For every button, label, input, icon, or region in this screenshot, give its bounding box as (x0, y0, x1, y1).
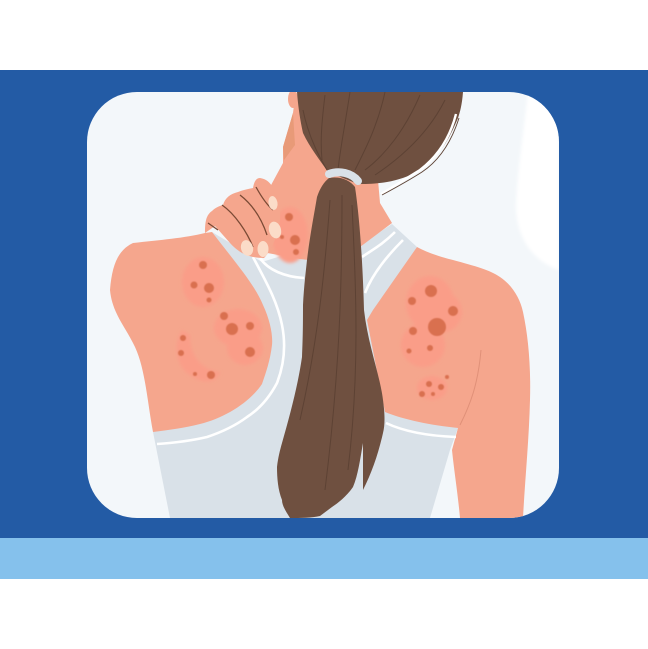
left shoulder and back (110, 232, 272, 432)
ear (288, 92, 298, 108)
hair fine dark strand (382, 118, 459, 195)
hair strand lines (300, 92, 445, 490)
lighter rash patches (177, 207, 462, 400)
card background (87, 92, 559, 518)
infographic illustration (0, 70, 648, 579)
hair outer strand (381, 114, 456, 194)
dark spots (178, 213, 458, 397)
arm crease line (460, 350, 481, 425)
hair tie (329, 172, 358, 181)
ponytail (277, 177, 384, 518)
palm and fingers (205, 178, 280, 258)
rash patches and spots (177, 207, 462, 400)
hair (277, 92, 463, 518)
shirt highlight lines (157, 232, 456, 444)
ear shadow on neck (283, 113, 295, 160)
white background shape (516, 92, 559, 270)
right shoulder, back and arm (367, 247, 530, 518)
blue band (0, 70, 648, 538)
woman's body (110, 90, 530, 518)
fingernails (239, 195, 283, 257)
hand on neck (205, 178, 283, 258)
shirt (153, 224, 458, 518)
illustration card (87, 90, 559, 518)
finger lines (208, 187, 273, 247)
light blue strip (0, 538, 648, 579)
hair top (297, 92, 463, 184)
neck (268, 100, 392, 260)
